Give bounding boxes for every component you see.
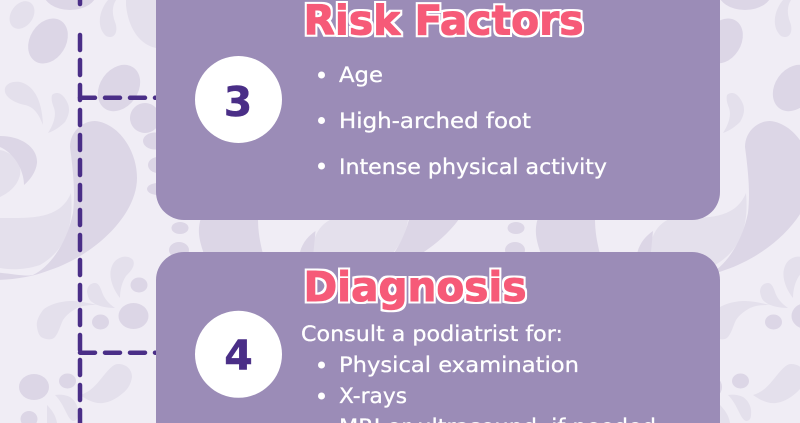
list: diagnosis items: Physical examination <box>339 353 579 378</box>
panel: diagnosis <box>156 252 720 423</box>
list: risk factor items <box>318 63 607 180</box>
panel: risk factors <box>156 0 720 220</box>
list: diagnosis items <box>318 353 656 423</box>
list: risk factor items: High-arched foot <box>339 109 531 134</box>
list: risk factor items: Intense physical activity <box>339 155 607 180</box>
list: risk factor items: Age <box>339 63 383 88</box>
badge: number 3: 3 <box>224 78 252 126</box>
heading: Diagnosis: Diagnosis <box>304 263 526 311</box>
text: diagnosis intro: Consult a podiatrist for: <box>301 322 563 347</box>
connector: dashed timeline <box>80 0 156 423</box>
badge: number 3 <box>195 56 282 143</box>
list: diagnosis items: X-rays <box>339 384 407 409</box>
badge: number 4: 4 <box>224 332 253 380</box>
badge: number 4 <box>195 311 282 398</box>
